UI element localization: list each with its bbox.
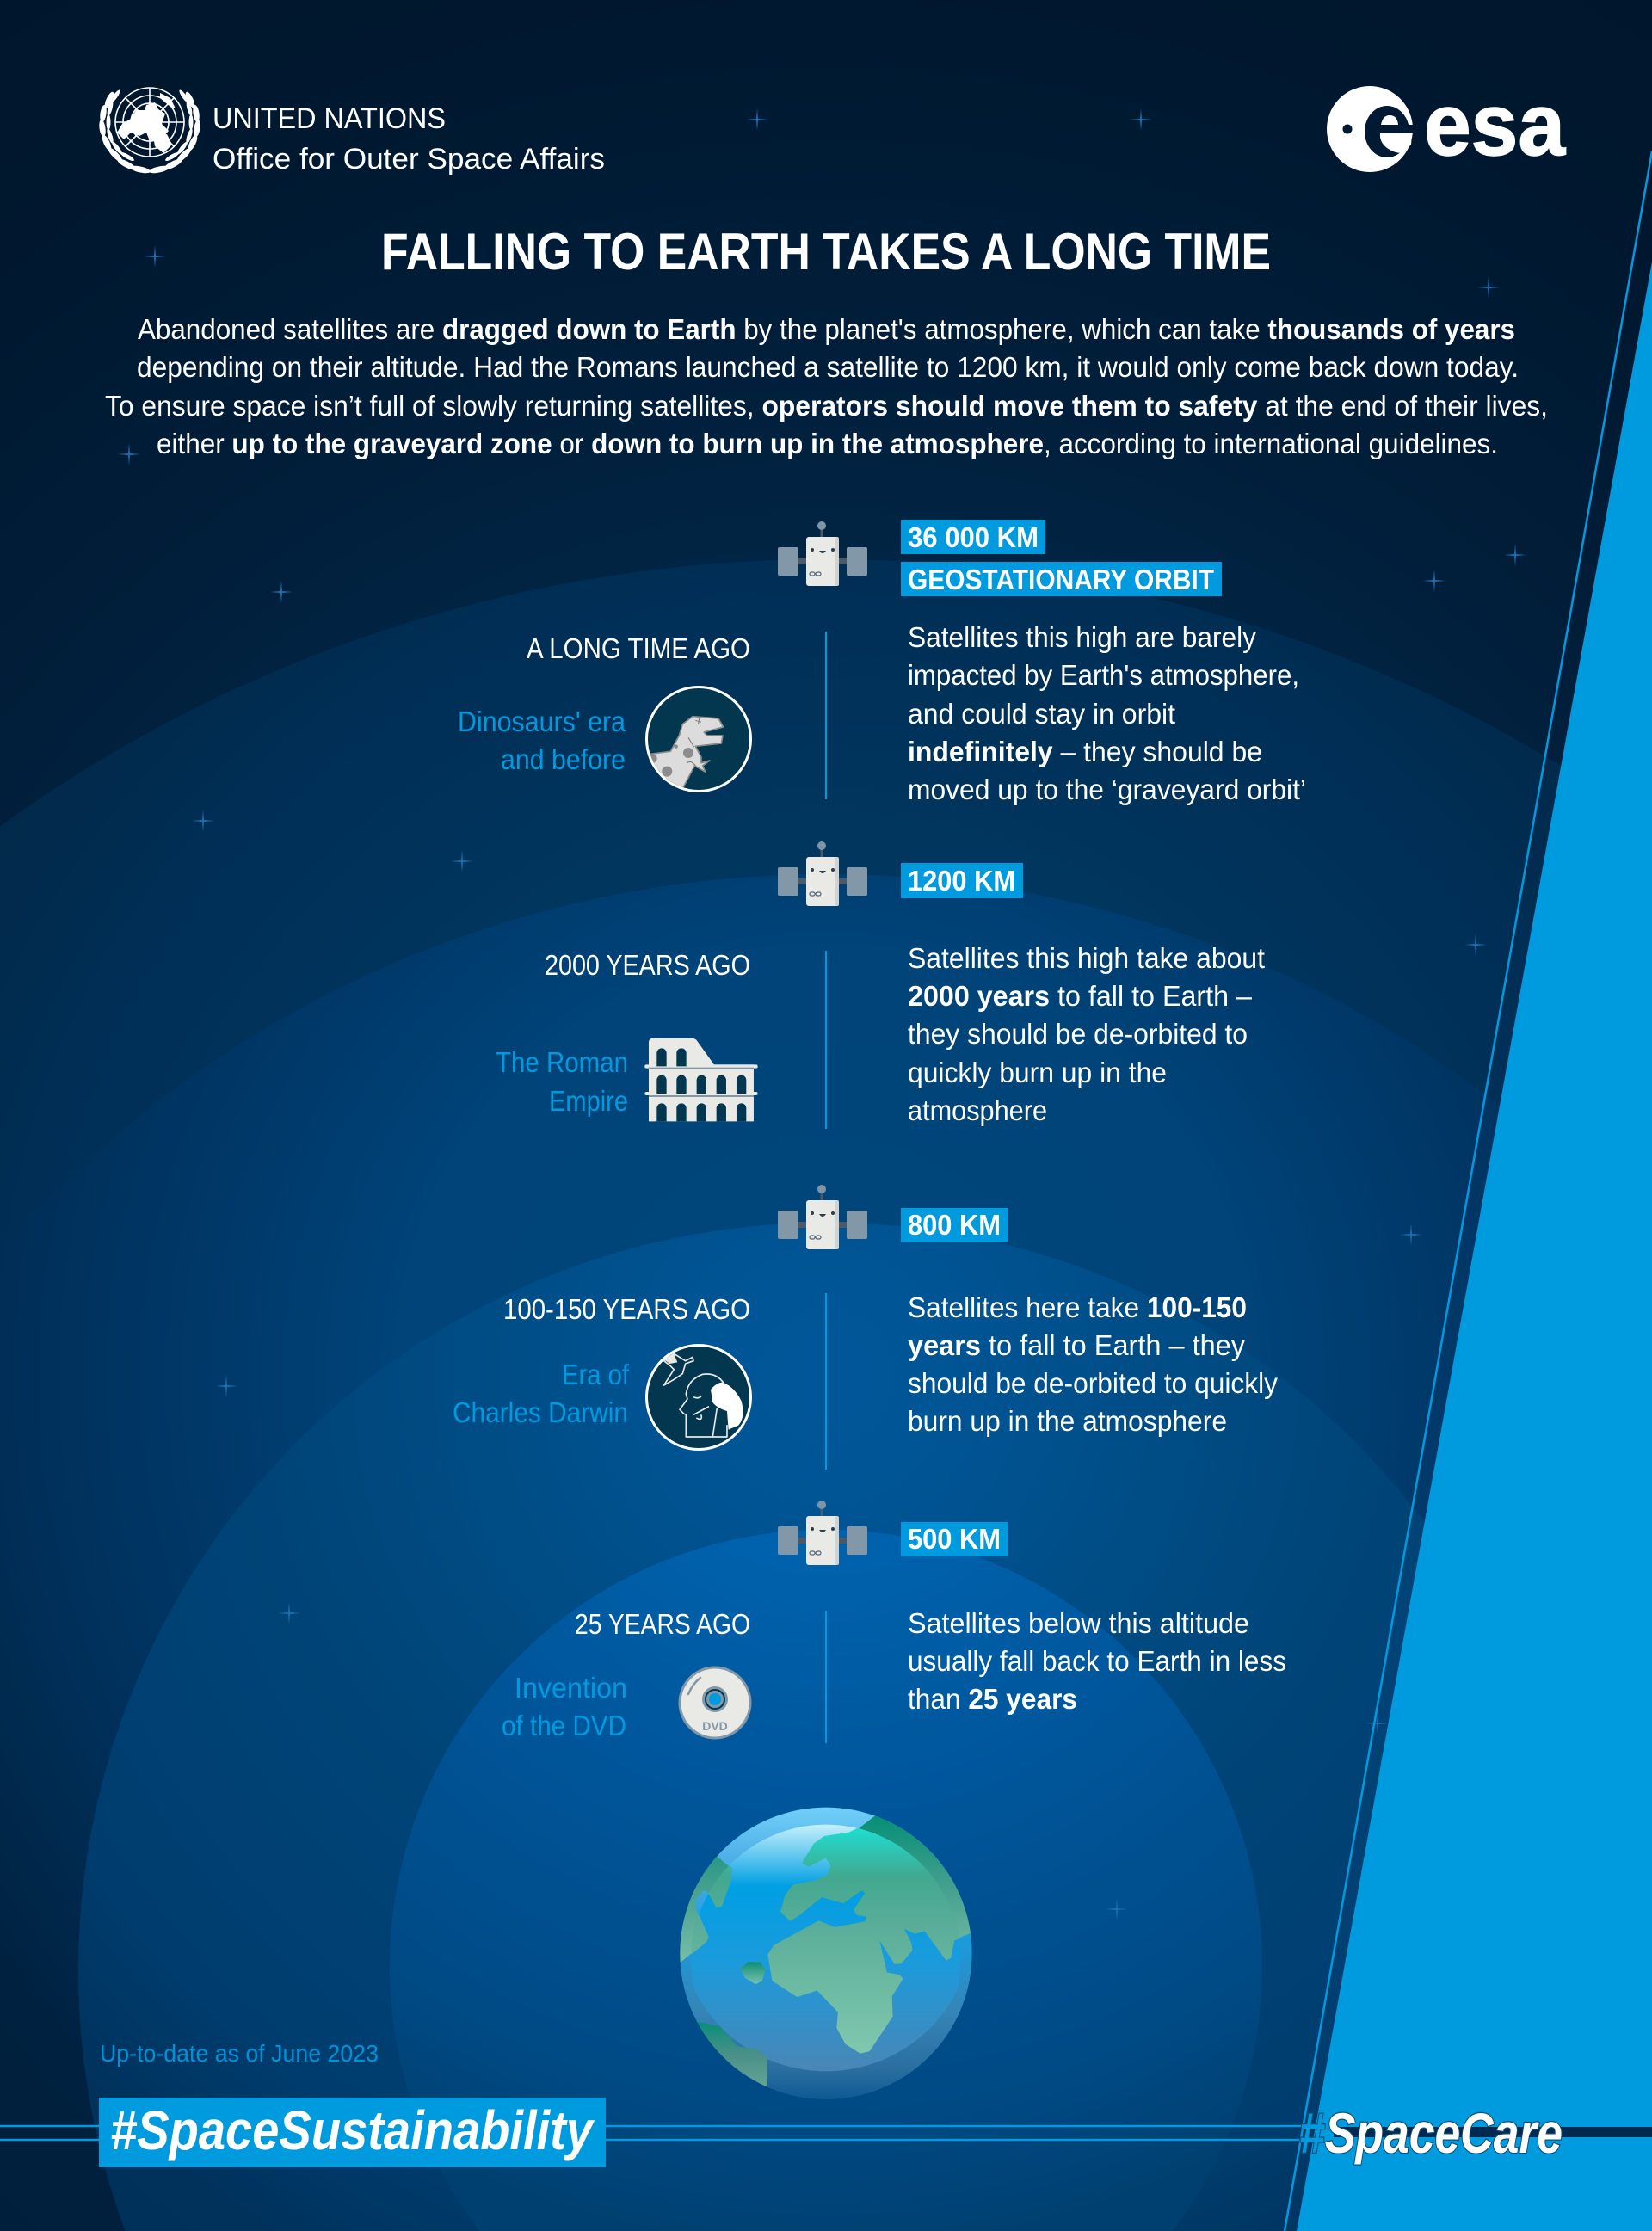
section: 500 km xyxy=(502,1501,1286,1743)
title: FALLING TO EARTH TAKES A LONG TIME xyxy=(381,223,1271,280)
ESA logo xyxy=(1327,76,1566,174)
hashtag: SpaceCare: #SpaceCare xyxy=(1299,2101,1563,2165)
atmosphere rings xyxy=(0,559,1652,2231)
icon: colosseum xyxy=(644,1038,758,1121)
UN wordmark: UNITED NATIONS xyxy=(213,102,446,135)
description: burn up in the atmosphere xyxy=(908,1405,1227,1437)
tag: 36 000 km: 36 000 KM xyxy=(908,521,1039,553)
description xyxy=(908,1607,1286,1715)
section: 800 km xyxy=(453,1185,1278,1470)
blue diagonal panel xyxy=(1297,262,1652,2231)
icon: satellite xyxy=(778,841,867,906)
icon: UN emblem xyxy=(98,88,201,175)
intro text: either up to the graveyard zone or down to burn up in the atmosphere, according to international guidelines. xyxy=(157,428,1498,459)
description: 2000 years to fall to Earth – xyxy=(908,980,1253,1012)
UN wordmark: Office for Outer Space Affairs xyxy=(213,143,605,176)
description: than 25 years xyxy=(908,1683,1077,1715)
tag: 500 km: 500 KM xyxy=(908,1523,1001,1555)
era label xyxy=(496,1046,628,1117)
section: 36 000 km geostationary orbit xyxy=(458,520,1306,805)
intro text: Abandoned satellites are dragged down to Earth by the planet's atmosphere, which can take thousands of years xyxy=(138,313,1515,345)
era label xyxy=(453,1359,630,1428)
UN logo xyxy=(98,88,605,176)
dark band on blue panel xyxy=(1334,2127,1652,2137)
note: date: Up-to-date as of June 2023 xyxy=(100,2040,379,2067)
UN wordmark xyxy=(213,102,605,176)
description: impacted by Earth's atmosphere, xyxy=(908,659,1299,691)
era label: of the DVD xyxy=(502,1710,626,1741)
icon: satellite xyxy=(778,521,867,586)
timeline divider xyxy=(825,1293,827,1470)
description: quickly burn up in the xyxy=(908,1057,1167,1088)
description: usually fall back to Earth in less xyxy=(908,1645,1286,1677)
era label: The Roman xyxy=(496,1046,628,1078)
era label: Charles Darwin xyxy=(453,1396,628,1428)
timeline divider xyxy=(825,951,827,1129)
tag: geostationary orbit: GEOSTATIONARY ORBIT xyxy=(908,564,1214,595)
era label: Era of xyxy=(562,1359,630,1390)
icon: dinosaur xyxy=(643,687,750,800)
intro text: depending on their altitude. Had the Romans launched a satellite to 1200 km, it would only come back down today. xyxy=(137,351,1519,383)
timeline divider xyxy=(825,1611,827,1743)
tag: 800 km: 800 KM xyxy=(908,1209,1001,1241)
description xyxy=(908,1291,1278,1437)
timeline divider xyxy=(825,632,827,799)
intro text xyxy=(105,313,1548,459)
era label xyxy=(502,1672,627,1741)
era heading: A LONG TIME AGO xyxy=(527,632,750,664)
description: Satellites this high are barely xyxy=(908,621,1256,653)
description: Satellites here take 100-150 xyxy=(908,1291,1247,1323)
description: Satellites this high take about xyxy=(908,942,1265,974)
stars xyxy=(118,108,1526,1920)
description xyxy=(908,942,1265,1126)
section: 1200 km xyxy=(496,841,1265,1129)
description: indefinitely – they should be xyxy=(908,736,1262,767)
hashtag: SpaceSustainability: #SpaceSustainability xyxy=(110,2099,595,2161)
description: moved up to the ‘graveyard orbit’ xyxy=(908,773,1306,805)
icon: satellite xyxy=(778,1501,867,1565)
intro text: To ensure space isn’t full of slowly returning satellites, operators should move them to safety at the end of their lives, xyxy=(105,390,1548,422)
earth xyxy=(680,1807,972,2099)
era heading: 100-150 YEARS AGO xyxy=(503,1293,750,1325)
icon: DVD: DVD xyxy=(702,1719,728,1733)
description: atmosphere xyxy=(908,1094,1047,1126)
description: Satellites below this altitude xyxy=(908,1607,1249,1639)
icon: ESA roundel xyxy=(1327,86,1413,172)
era label: Invention xyxy=(515,1672,627,1704)
thin diagonal line xyxy=(1285,151,1652,2231)
description: they should be de-orbited to xyxy=(908,1018,1248,1050)
tag: 1200 km: 1200 KM xyxy=(908,865,1015,897)
hashtag band lines xyxy=(0,2126,1301,2140)
era label: and before xyxy=(501,743,626,775)
era label: Dinosaurs' era xyxy=(458,706,626,737)
icon: DVD xyxy=(680,1667,750,1738)
era label xyxy=(458,706,626,775)
icon: Darwin portrait xyxy=(647,1346,750,1449)
description: should be de-orbited to quickly xyxy=(908,1367,1278,1399)
era heading: 2000 YEARS AGO xyxy=(545,949,750,981)
description: years to fall to Earth – they xyxy=(908,1329,1245,1361)
description xyxy=(908,621,1306,805)
era label: Empire xyxy=(549,1085,628,1117)
icon: satellite xyxy=(778,1185,867,1249)
ESA wordmark: esa xyxy=(1424,76,1566,174)
description: and could stay in orbit xyxy=(908,698,1175,730)
era heading: 25 YEARS AGO xyxy=(575,1608,750,1640)
